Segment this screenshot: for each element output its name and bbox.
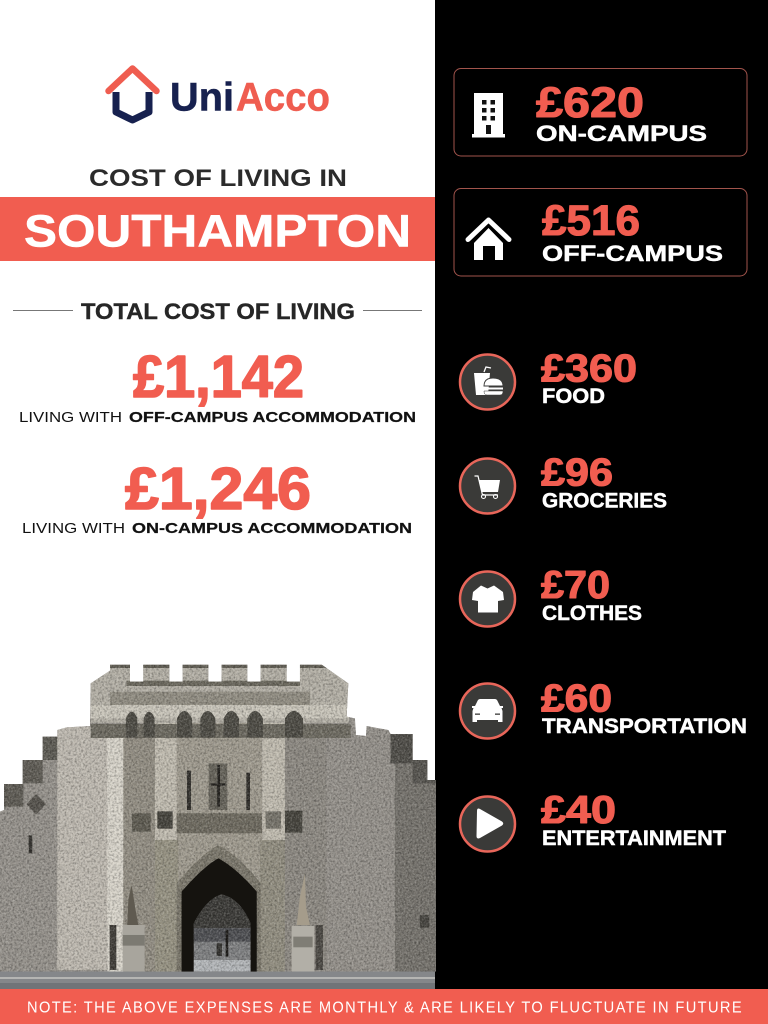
photo: Southampton Bargate castle bbox=[0, 650, 436, 989]
left white panel bbox=[0, 0, 436, 989]
caption bbox=[22, 520, 412, 537]
gate shadow over texture bbox=[182, 858, 257, 973]
label: CLOTHES bbox=[542, 602, 642, 625]
amount: £516 bbox=[542, 197, 640, 245]
caption bbox=[19, 409, 416, 426]
icon: house bbox=[468, 220, 509, 260]
amount: £620 bbox=[536, 79, 644, 127]
icon: car bbox=[460, 684, 515, 738]
ground bbox=[0, 966, 435, 989]
light grain texture bbox=[0, 650, 436, 973]
icon: burger and drink bbox=[460, 354, 515, 410]
label: ON-CAMPUS bbox=[536, 121, 707, 146]
logo wordmark bbox=[170, 76, 330, 120]
carved panel and cross slits bbox=[27, 763, 429, 970]
amount: £360 bbox=[541, 348, 637, 390]
expense: entertainment bbox=[460, 789, 726, 852]
expense: transportation bbox=[460, 678, 747, 738]
expense: groceries bbox=[460, 452, 667, 514]
machicolation arches bbox=[126, 711, 303, 737]
caption: LIVING WITH bbox=[19, 409, 122, 426]
statues and plinths bbox=[123, 873, 314, 973]
amount: £40 bbox=[541, 789, 616, 832]
stat: on-campus total bbox=[22, 456, 412, 537]
expense: clothes bbox=[460, 564, 642, 626]
icon: shopping cart bbox=[460, 458, 515, 514]
label: FOOD bbox=[542, 385, 605, 408]
card: off-campus accommodation bbox=[454, 188, 747, 276]
label: ENTERTAINMENT bbox=[542, 827, 726, 850]
subheading: total cost of living: TOTAL COST OF LIVING bbox=[81, 299, 355, 324]
card: on-campus accommodation bbox=[454, 68, 747, 156]
caption: LIVING WITH bbox=[22, 520, 125, 537]
icon: shirt bbox=[460, 572, 515, 626]
caption: OFF-CAMPUS ACCOMMODATION bbox=[129, 409, 416, 426]
stat: off-campus total bbox=[19, 344, 416, 426]
amount: £96 bbox=[541, 452, 613, 494]
heading: cost of living in: COST OF LIVING IN bbox=[89, 165, 347, 192]
amount: £60 bbox=[541, 678, 612, 720]
logo icon: house bbox=[108, 68, 156, 120]
label: TRANSPORTATION bbox=[542, 715, 747, 738]
label: OFF-CAMPUS bbox=[542, 241, 723, 266]
dark grain texture bbox=[0, 650, 436, 973]
logo wordmark: Uni bbox=[170, 76, 234, 120]
banner title: SOUTHAMPTON bbox=[24, 206, 411, 256]
logo: UniAcco bbox=[108, 68, 330, 120]
gate arch bbox=[177, 845, 261, 973]
label: GROCERIES bbox=[542, 490, 667, 512]
amount: £1,142 bbox=[133, 344, 304, 410]
castle structure bbox=[0, 650, 436, 973]
icon: play button bbox=[460, 796, 515, 852]
expense: food bbox=[460, 348, 637, 410]
caption: ON-CAMPUS ACCOMMODATION bbox=[132, 520, 412, 537]
logo wordmark: Acco bbox=[236, 76, 330, 120]
amount: £1,246 bbox=[125, 456, 311, 522]
right black panel bbox=[435, 0, 768, 989]
banner: Southampton bbox=[0, 197, 435, 261]
icon: apartment building bbox=[472, 93, 505, 138]
amount: £70 bbox=[541, 564, 610, 607]
footer note bar bbox=[0, 989, 768, 1024]
